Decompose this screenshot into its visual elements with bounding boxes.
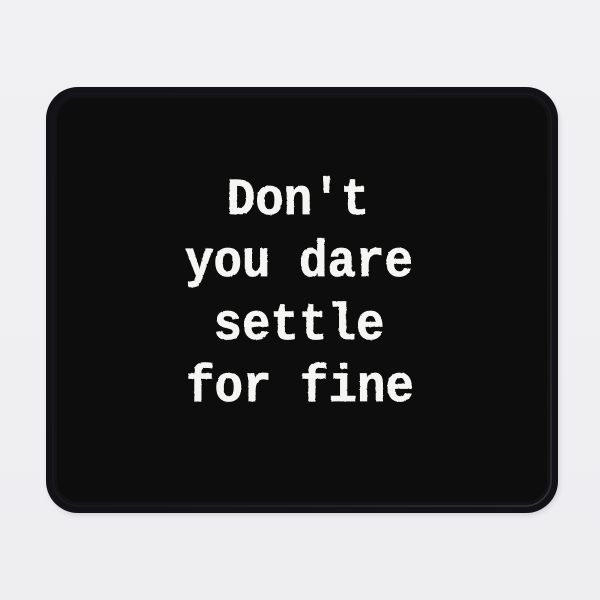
line 2: you dare: [185, 232, 413, 292]
line 4: for fine: [186, 357, 414, 417]
mouse pad: [46, 87, 558, 513]
line 1: Don't: [227, 170, 369, 230]
pad surface: [57, 98, 547, 502]
line 3: settle: [214, 295, 384, 355]
stitched border: [46, 87, 558, 513]
quote text: [185, 170, 414, 417]
mat shadow: [48, 91, 559, 515]
stitch highlight: [53, 94, 551, 506]
